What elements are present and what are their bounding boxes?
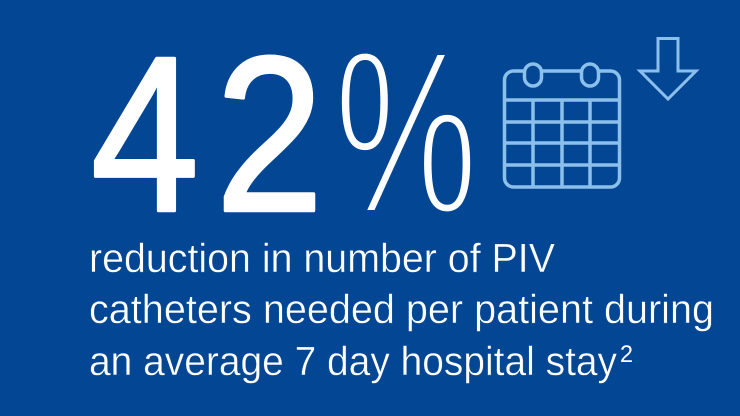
description text: reduction in number of PIV — [89, 235, 556, 281]
headline statistic: 42%: 2 — [216, 10, 324, 258]
headline statistic: 42% — [91, 1, 478, 263]
description text: an average 7 day hospital stay — [89, 338, 617, 384]
description text — [89, 235, 714, 384]
headline statistic: 42%: 4 — [91, 10, 199, 258]
description text: 2 — [620, 341, 633, 368]
headline statistic: 42%: % — [334, 1, 478, 263]
icon: down arrow — [640, 38, 696, 99]
icon: calendar — [504, 64, 620, 187]
description text: catheters needed per patient during — [89, 286, 714, 332]
